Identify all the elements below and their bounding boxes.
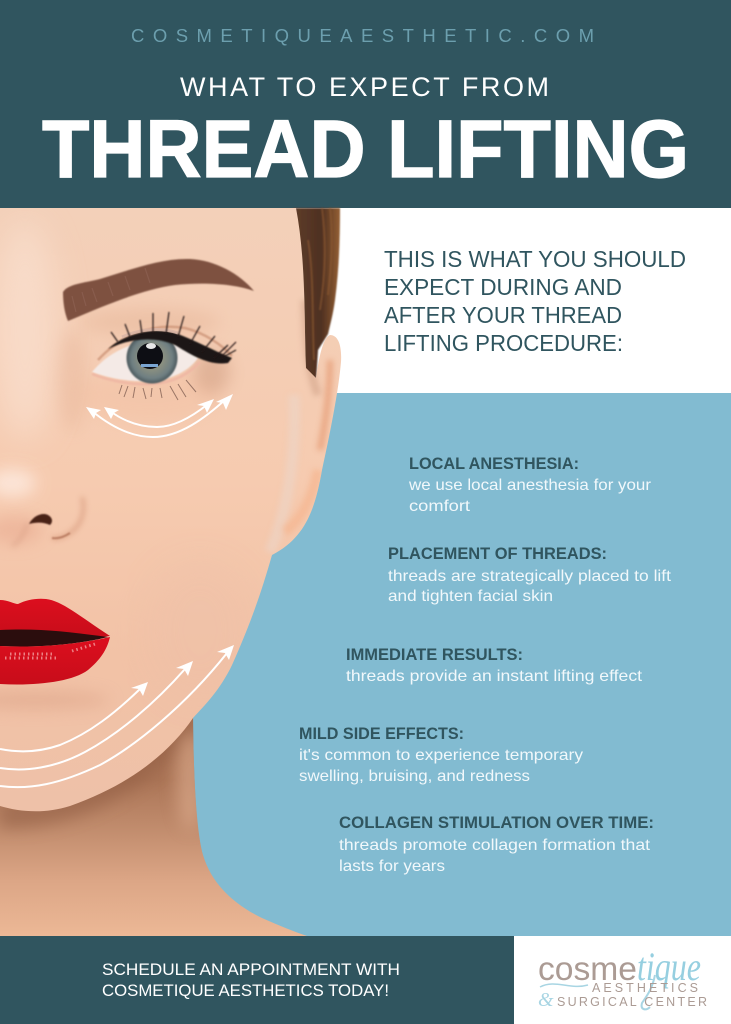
step: mild side effects: it's common to experience temporary <box>299 747 583 764</box>
step: placement of threads: threads are strategically placed to lift <box>388 568 672 585</box>
panel: blue background <box>0 393 731 936</box>
panel: intro text: LIFTING PROCEDURE: <box>384 330 623 356</box>
iris <box>126 332 178 384</box>
step: collagen stimulation: COLLAGEN STIMULATION OVER TIME: <box>339 814 654 832</box>
eye <box>92 312 236 400</box>
step: mild side effects: swelling, bruising, and redness <box>299 768 530 785</box>
lashes <box>111 312 236 359</box>
panel: intro text: AFTER YOUR THREAD <box>384 302 622 328</box>
logo: & <box>538 989 554 1011</box>
step: collagen stimulation: threads promote collagen formation that <box>339 837 651 854</box>
lips <box>0 599 110 684</box>
step: placement of threads: and tighten facial skin <box>388 588 553 605</box>
sclera <box>92 342 198 381</box>
footer call to action <box>0 936 514 1024</box>
step: immediate results: IMMEDIATE RESULTS: <box>346 646 523 664</box>
step: placement of threads <box>388 545 672 605</box>
logo: tique <box>637 944 701 989</box>
footer call to action: COSMETIQUE AESTHETICS TODAY! <box>102 982 389 1000</box>
panel: intro text <box>340 208 731 393</box>
skin of face and ear <box>0 208 341 811</box>
upper lid <box>108 331 232 363</box>
hair <box>293 208 340 382</box>
nose <box>12 497 84 546</box>
face shading <box>0 220 330 709</box>
logo: cosme <box>538 950 637 987</box>
eyebrow <box>63 259 254 321</box>
step: placement of threads: PLACEMENT OF THREADS: <box>388 545 607 563</box>
step: local anesthesia <box>408 455 652 515</box>
jawline lift arrows <box>0 645 234 787</box>
step: mild side effects: MILD SIDE EFFECTS: <box>299 725 464 743</box>
step: mild side effects <box>299 725 583 785</box>
photo: woman's face <box>0 208 341 936</box>
lower lid rim <box>92 362 200 384</box>
step: local anesthesia: comfort <box>409 498 471 515</box>
step: local anesthesia: LOCAL ANESTHESIA: <box>409 455 579 473</box>
website address: COSMETIQUEAESTHETIC.COM <box>131 25 594 46</box>
logo: SURGICAL CENTER <box>557 995 707 1009</box>
panel: intro text: EXPECT DURING AND <box>384 274 622 300</box>
nostril <box>29 514 52 525</box>
subtitle: WHAT TO EXPECT FROM <box>180 72 549 102</box>
step: immediate results: threads provide an instant lifting effect <box>346 668 643 685</box>
step: immediate results <box>346 646 643 685</box>
step: collagen stimulation <box>339 814 654 875</box>
panel: intro text: THIS IS WHAT YOU SHOULD <box>384 246 686 272</box>
step: local anesthesia: we use local anesthesia for your <box>408 477 652 494</box>
logo <box>514 936 731 1024</box>
lower lashes <box>119 380 196 400</box>
lid crease <box>98 327 232 360</box>
eye lift arrows <box>86 394 233 437</box>
logo: AESTHETICS <box>592 981 698 995</box>
step: collagen stimulation: lasts for years <box>339 858 445 875</box>
footer call to action: SCHEDULE AN APPOINTMENT WITH <box>102 961 400 979</box>
header band <box>0 0 731 208</box>
neck <box>0 718 307 936</box>
title: THREAD LIFTING <box>42 104 689 195</box>
